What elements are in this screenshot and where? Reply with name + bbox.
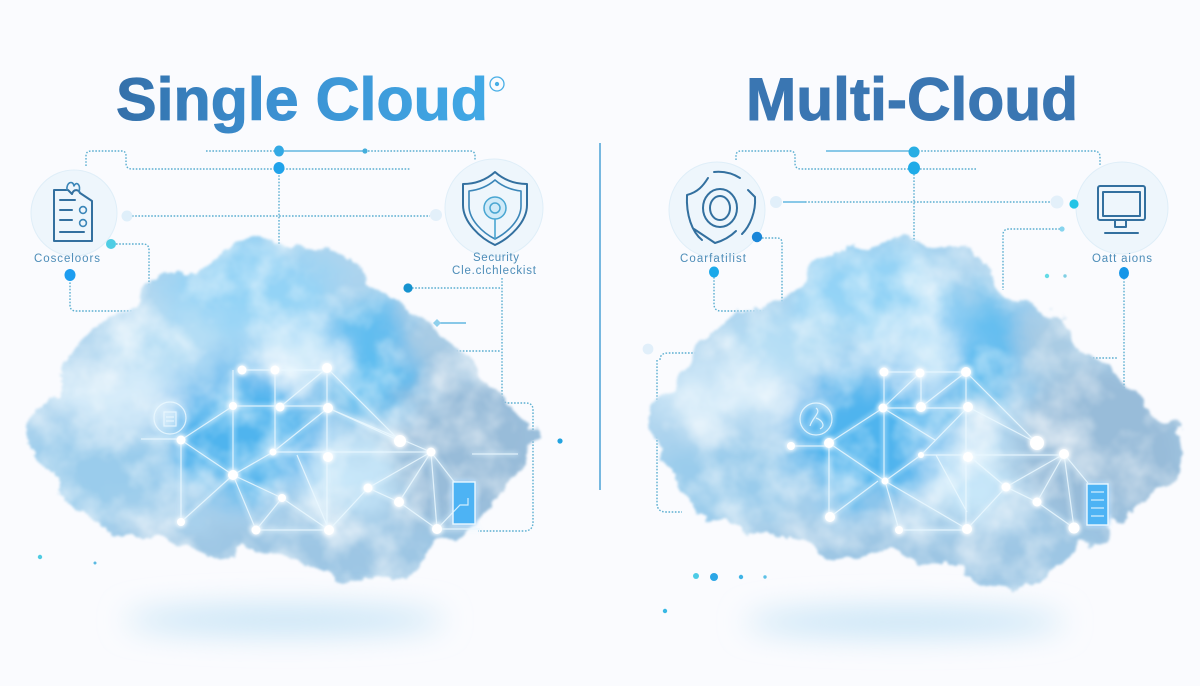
label: Oatt aions: Oatt aions	[1092, 253, 1152, 265]
cloud	[24, 234, 542, 586]
ground shadow	[125, 607, 445, 633]
title: Multi-Cloud: Multi-Cloud	[746, 66, 1078, 133]
connector nodes	[643, 146, 1129, 613]
icon: monitor badge	[1076, 162, 1168, 254]
network diagram	[141, 363, 518, 535]
divider	[599, 143, 601, 490]
connector nodes	[38, 146, 563, 564]
title: Single Cloud: Single Cloud	[116, 66, 488, 133]
connector lines	[70, 151, 533, 531]
network diagram	[787, 367, 1108, 534]
panel: multi-cloud	[620, 66, 1200, 635]
label: Cosceloors: Cosceloors	[34, 253, 100, 265]
label: second line: Cle.clchleckist	[452, 265, 537, 277]
cloud	[647, 233, 1184, 593]
connector lines	[657, 151, 1124, 512]
icon: checklist badge	[31, 170, 117, 256]
icon: security shield	[445, 159, 543, 257]
icon: registered mark	[490, 77, 504, 91]
ground shadow	[745, 609, 1065, 635]
label: Security Checklist: Security	[473, 252, 519, 264]
icon: shield rings badge	[669, 162, 765, 258]
panel: single cloud	[0, 66, 570, 633]
label: Coarfatilist: Coarfatilist	[680, 253, 747, 265]
